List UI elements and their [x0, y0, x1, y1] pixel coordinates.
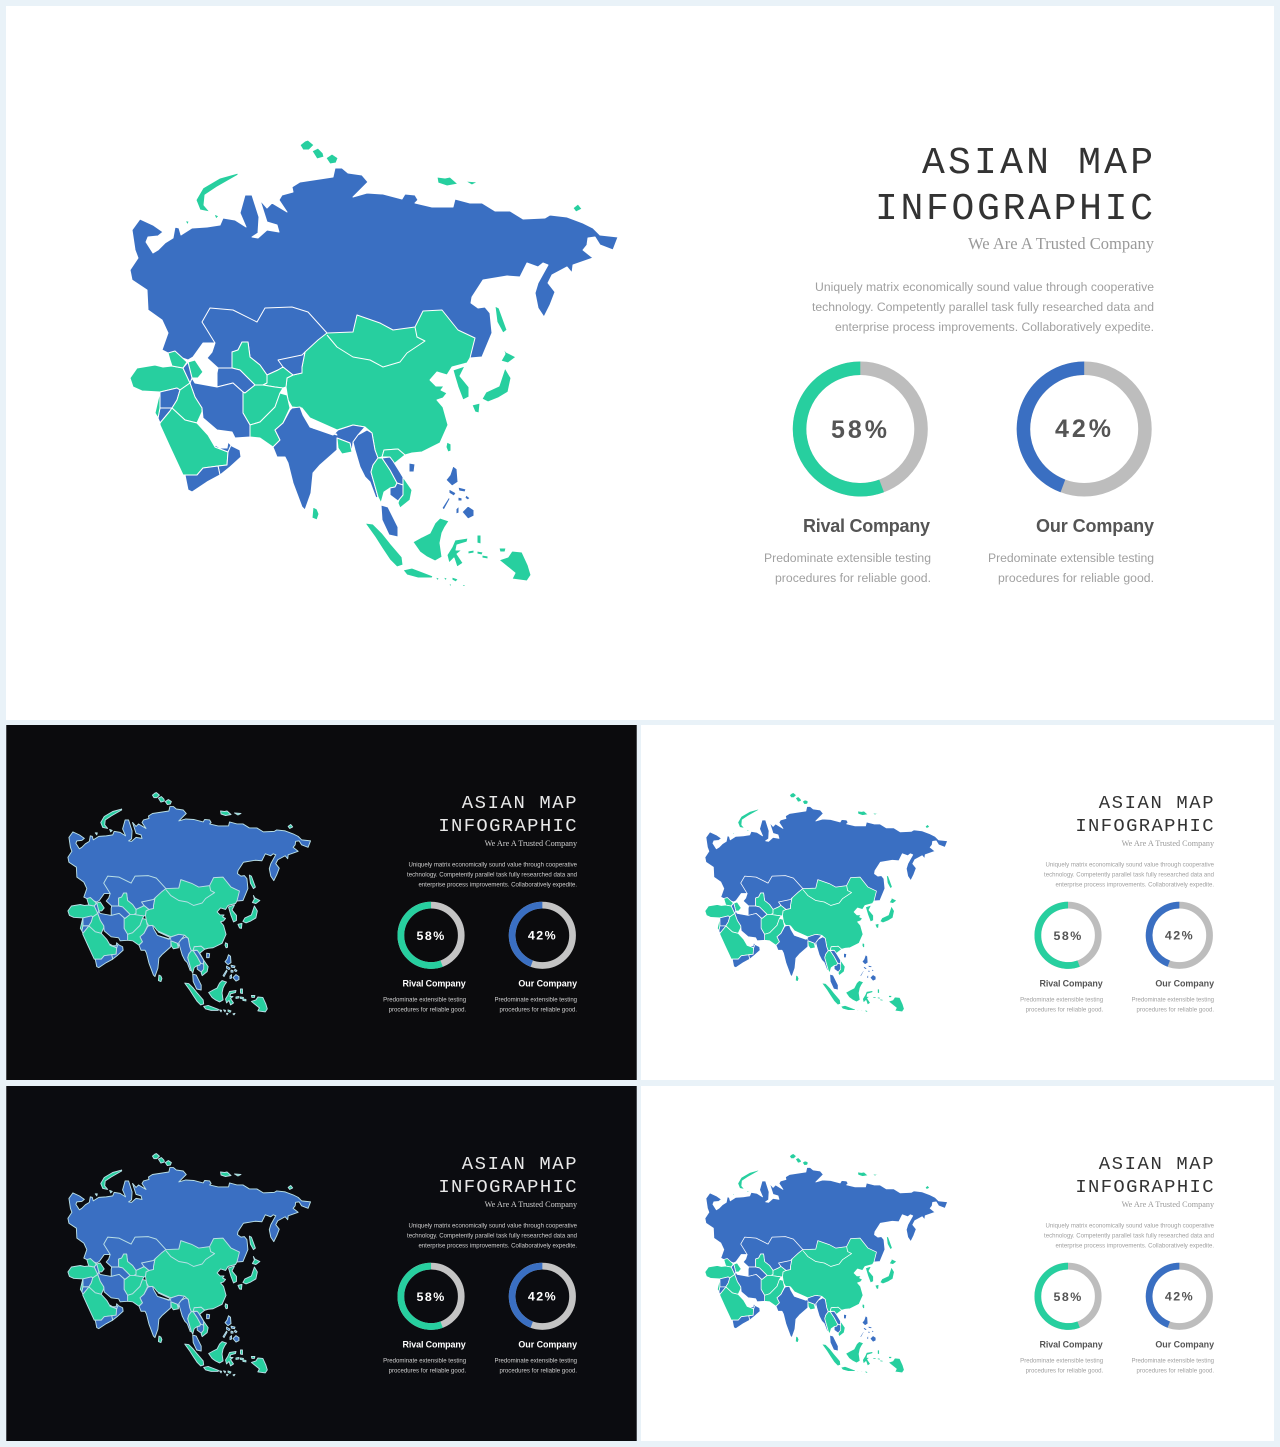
region: Sumatra [365, 523, 403, 567]
text: our company: Our Company [1155, 1340, 1214, 1350]
text: subtitle: We Are A Trusted Company [485, 1200, 578, 1209]
text: rival company: Rival Company [803, 516, 930, 536]
map: Asia [130, 140, 618, 587]
heading: title: ASIAN MAP [922, 142, 1153, 185]
text: rival company [383, 979, 466, 1013]
text: intro paragraph: enterprise process improvements. Collaboratively expedite. [418, 883, 577, 889]
region: Korea [453, 366, 469, 400]
text: our company: Our Company [1155, 979, 1214, 989]
region: Israel [155, 392, 160, 418]
text: intro paragraph [407, 1224, 578, 1250]
region: Iraq [172, 383, 202, 423]
text: our company: Predominate extensible testing [495, 997, 577, 1003]
donut chart: our 42% [1149, 905, 1210, 966]
region: Jordan [158, 408, 172, 423]
region: Armenia [183, 362, 192, 383]
text: intro paragraph [1044, 1224, 1215, 1250]
text: our company [495, 979, 577, 1013]
text: our company: procedures for reliable good. [998, 571, 1154, 585]
region: UAE [215, 442, 231, 452]
region: Laos [382, 457, 403, 485]
region: New Guinea [499, 551, 531, 581]
text: rival company [1020, 979, 1103, 1013]
region: Pakistan [250, 393, 290, 447]
donut chart: rival 58%: 58% [1053, 1290, 1081, 1304]
text: rival company: Rival Company [1040, 979, 1103, 989]
text: subtitle: We Are A Trusted Company [1122, 839, 1215, 848]
text: our company: Predominate extensible testing [495, 1358, 577, 1364]
text: intro paragraph: enterprise process improvements. Collaboratively expedite. [418, 1244, 577, 1250]
region: Cambodia [390, 483, 403, 501]
text: intro paragraph: Uniquely matrix economically sound value through cooperative [409, 863, 578, 869]
text: our company: procedures for reliable good. [1136, 1368, 1214, 1374]
region: Turkmenistan [217, 368, 255, 393]
heading: title [438, 1153, 577, 1198]
text: intro paragraph: Uniquely matrix economically sound value through cooperative [815, 280, 1154, 294]
text: rival company: Predominate extensible testing [764, 551, 931, 565]
region: Afghanistan [243, 385, 283, 425]
text: our company: Our Company [518, 1340, 577, 1350]
heading: title: ASIAN MAP [1099, 1153, 1214, 1175]
donut chart: rival 58%: 58% [831, 416, 887, 444]
donut chart: our 42%: 42% [1055, 415, 1111, 443]
text: our company: procedures for reliable good. [499, 1007, 577, 1013]
donut chart: rival 58% [800, 368, 921, 490]
text: rival company: procedures for reliable good. [775, 571, 931, 585]
text: intro paragraph [1044, 863, 1215, 889]
region: Turkey [130, 365, 190, 392]
donut chart: rival 58% [401, 1266, 461, 1327]
region: Sakhalin [495, 306, 507, 333]
border: Nepal [311, 420, 337, 435]
borders: Kazakhstan and Mongolia [202, 307, 425, 367]
text: subtitle: We Are A Trusted Company [1122, 1200, 1215, 1209]
region: Hokkaido [501, 347, 516, 363]
text: rival company: Predominate extensible testing [383, 997, 466, 1003]
region: Borneo [413, 518, 449, 561]
region: Azerbaijan [188, 360, 203, 378]
region: Malay Peninsula [381, 505, 398, 537]
region: Yemen [185, 466, 220, 492]
donut chart: our 42% [1023, 368, 1145, 490]
heading: title: INFOGRAPHIC [1075, 1176, 1214, 1198]
region: Honshu [482, 368, 511, 402]
donut chart: our 42%: 42% [528, 1289, 556, 1303]
donut chart: our 42%: 42% [1165, 1289, 1193, 1303]
region: Sulawesi [447, 538, 468, 567]
region: Hainan [409, 463, 415, 472]
text: our company [1132, 979, 1214, 1013]
text: intro paragraph: Uniquely matrix economically sound value through cooperative [1046, 863, 1215, 869]
text: rival company: Predominate extensible testing [1020, 997, 1103, 1003]
text: intro paragraph: enterprise process improvements. Collaboratively expedite. [1055, 1244, 1214, 1250]
text: rival company: procedures for reliable good. [389, 1007, 466, 1013]
text: intro paragraph: enterprise process improvements. Collaboratively expedite. [1055, 883, 1214, 889]
region: Philippines [442, 466, 474, 519]
text: rival company: Predominate extensible testing [383, 1358, 466, 1364]
donut chart: rival 58% [1038, 905, 1098, 966]
donut chart: our 42% [1149, 1266, 1210, 1327]
heading: title: INFOGRAPHIC [438, 815, 577, 837]
text: intro paragraph: technology. Competently parallel task fully researched data and [1044, 873, 1214, 879]
donut chart: our 42% [512, 1266, 573, 1327]
region: Novaya Zemlya [196, 173, 238, 212]
panel: main light slide [6, 6, 1274, 720]
text: subtitle: We Are A Trusted Company [968, 234, 1155, 253]
region: India [273, 407, 365, 510]
region: Georgia [168, 351, 187, 368]
region: Sri Lanka [312, 507, 319, 520]
heading: title: ASIAN MAP [1099, 792, 1214, 814]
text: rival company: Rival Company [403, 1340, 466, 1350]
text: our company: procedures for reliable good. [499, 1368, 577, 1374]
heading: title [438, 792, 577, 837]
region: Vietnam [382, 449, 412, 508]
region: Oman [218, 445, 241, 475]
region: Arctic islands [185, 140, 582, 225]
region: Java [403, 568, 433, 578]
text: rival company [383, 1340, 466, 1374]
text: our company: Our Company [1036, 516, 1154, 536]
text: intro paragraph: Uniquely matrix economically sound value through cooperative [1046, 1224, 1215, 1230]
region: Myanmar [353, 430, 378, 498]
region: Russia and Kazakhstan [130, 168, 618, 375]
map: Asia [705, 793, 948, 1015]
text: subtitle: We Are A Trusted Company [485, 839, 578, 848]
region: Maluku islands [468, 535, 506, 559]
region: Kyushu [472, 403, 480, 413]
region: Lesser Sunda islands [435, 577, 466, 587]
text: intro paragraph: technology. Competently parallel task fully researched data and [812, 300, 1154, 314]
region: Uzbekistan [232, 342, 267, 385]
map: Asia [68, 793, 311, 1015]
text: intro paragraph: Uniquely matrix economically sound value through cooperative [409, 1224, 578, 1230]
text: our company [495, 1340, 577, 1374]
heading: title: ASIAN MAP [462, 792, 577, 814]
heading: title: ASIAN MAP [462, 1153, 577, 1175]
text: rival company [764, 516, 931, 585]
donut chart: rival 58% [401, 905, 461, 966]
text: our company [1132, 1340, 1214, 1374]
text: rival company: procedures for reliable good. [389, 1368, 466, 1374]
heading: title [875, 142, 1153, 231]
text: intro paragraph: technology. Competently parallel task fully researched data and [407, 873, 577, 879]
donut chart: our 42%: 42% [528, 928, 556, 942]
heading: title: INFOGRAPHIC [875, 188, 1153, 231]
region: Saudi Arabia [160, 408, 228, 475]
donut chart: our 42% [512, 905, 573, 966]
text: our company: Predominate extensible testing [1132, 997, 1214, 1003]
text: intro paragraph: technology. Competently parallel task fully researched data and [1044, 1234, 1214, 1240]
donut chart: rival 58% [1038, 1266, 1098, 1327]
map: Asia [68, 1154, 311, 1376]
panel: light slide bottom right [641, 1086, 1274, 1441]
region: Syria [160, 388, 180, 408]
donut chart: rival 58%: 58% [416, 1290, 444, 1304]
text: rival company: procedures for reliable good. [1026, 1007, 1103, 1013]
donut chart: rival 58%: 58% [1053, 929, 1081, 943]
panel: light slide top right [641, 725, 1274, 1080]
heading: title: INFOGRAPHIC [1075, 815, 1214, 837]
panel: dark slide top left [6, 725, 637, 1080]
text: our company [988, 516, 1154, 585]
text: intro paragraph: technology. Competently parallel task fully researched data and [407, 1234, 577, 1240]
region: China and Mongolia [286, 310, 475, 458]
text: our company: Our Company [518, 979, 577, 989]
region: Bangladesh [337, 438, 352, 454]
region: Kyrgyzstan [278, 352, 305, 375]
map: Asia [705, 1154, 948, 1376]
donut chart: rival 58%: 58% [416, 929, 444, 943]
text: rival company: Predominate extensible testing [1020, 1358, 1103, 1364]
text: intro paragraph [812, 280, 1154, 334]
donut chart: our 42%: 42% [1165, 928, 1193, 942]
region: Iran [190, 378, 250, 438]
text: intro paragraph [407, 863, 578, 889]
panel: dark slide bottom left [6, 1086, 637, 1441]
heading: title [1075, 1153, 1214, 1198]
region: Tajikistan [263, 367, 293, 388]
text: our company: procedures for reliable good. [1136, 1007, 1214, 1013]
text: rival company: Rival Company [403, 979, 466, 989]
region: Taiwan [446, 442, 451, 452]
text: intro paragraph: enterprise process improvements. Collaboratively expedite. [835, 320, 1154, 334]
heading: title: INFOGRAPHIC [438, 1176, 577, 1198]
text: our company: Predominate extensible testing [1132, 1358, 1214, 1364]
text: rival company: procedures for reliable good. [1026, 1368, 1103, 1374]
region: Thailand [371, 458, 397, 503]
text: our company: Predominate extensible testing [988, 551, 1154, 565]
heading: title [1075, 792, 1214, 837]
text: rival company [1020, 1340, 1103, 1374]
text: rival company: Rival Company [1040, 1340, 1103, 1350]
